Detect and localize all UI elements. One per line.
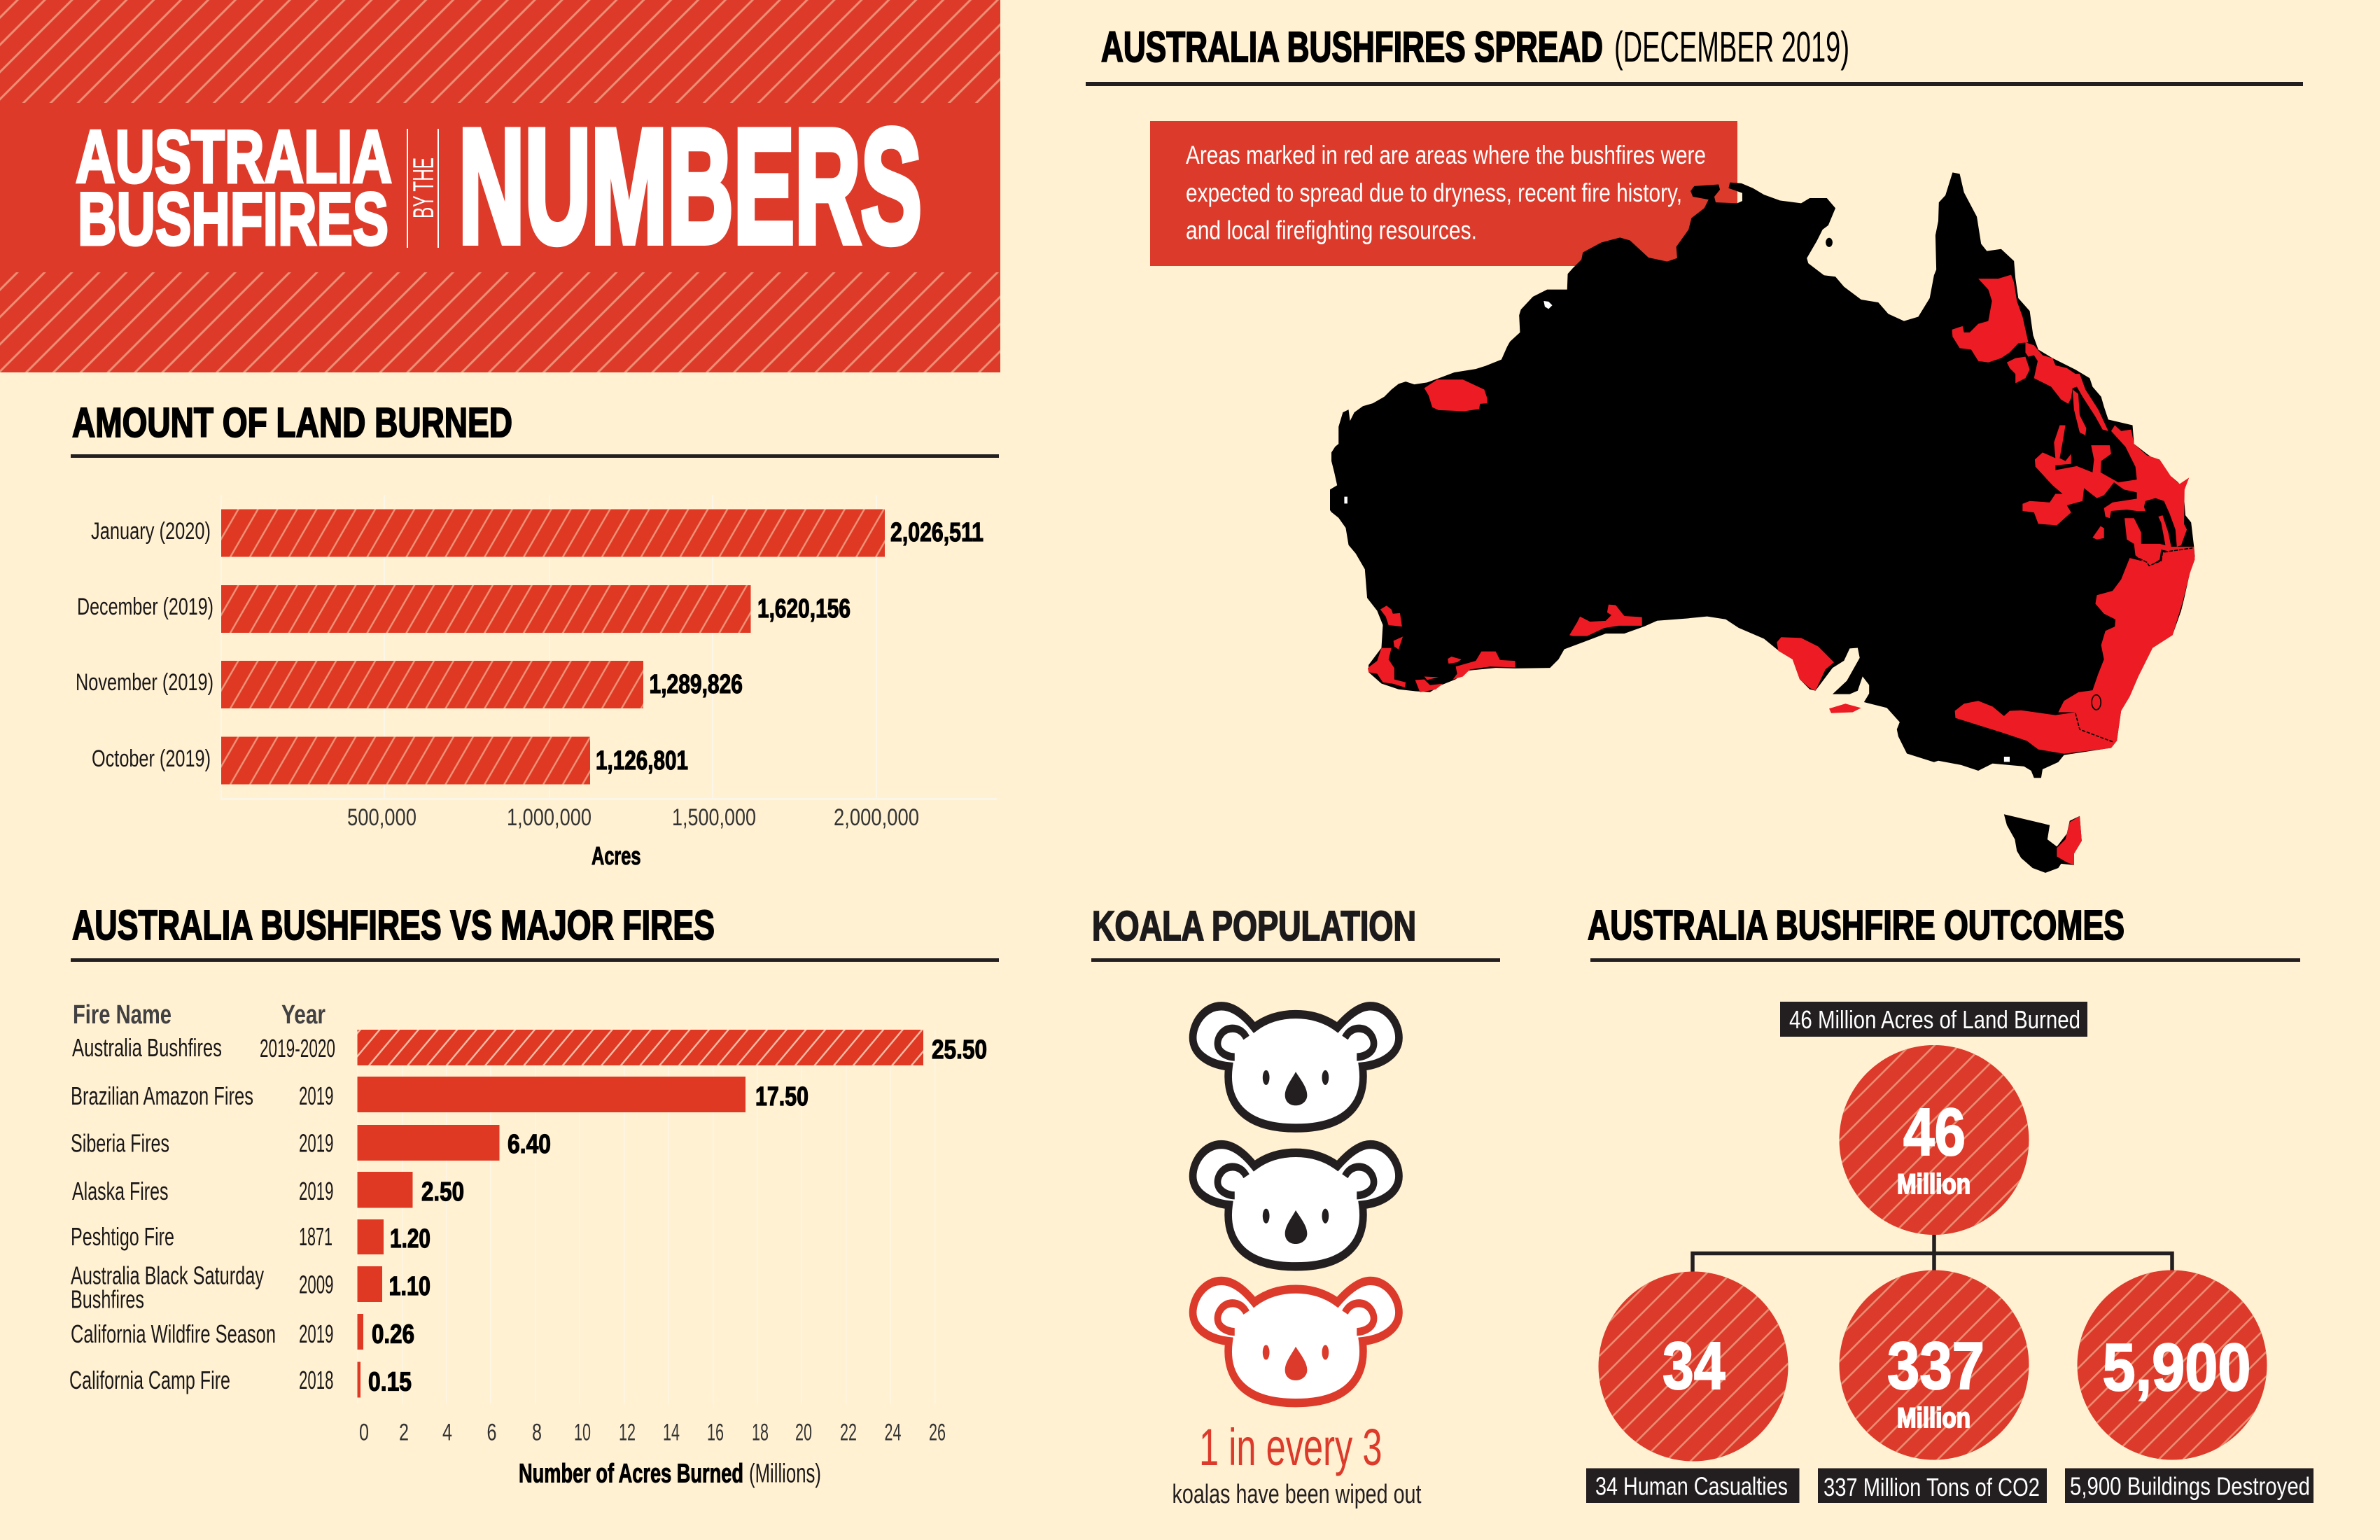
callout: map explanation [1150,121,1737,266]
x axis title: (Millions) [749,1459,821,1488]
fire area: west interior [1424,379,1487,412]
row: Australia Black Saturday Bushfires: 1.10 [389,1272,430,1301]
row: Australia Black Saturday Bushfires [71,1261,430,1313]
row: Peshtigo Fire: 1871 [299,1222,332,1251]
header banner [0,0,1000,372]
row: California Wildfire Season [71,1314,414,1350]
row: California Wildfire Season: California Wildfire Season [71,1320,276,1348]
row: Australia Black Saturday Bushfires: Bushfires [71,1285,144,1313]
koala icons [1193,1006,1399,1403]
bar: December 2019: 1,620,156 [757,594,850,624]
row: Brazilian Amazon Fires: 2019 [299,1082,333,1110]
bar: October 2019: 1,126,801 [596,746,688,776]
axis labels: acres: Acres [592,841,641,870]
title: Australia Bushfires: AUSTRALIA [76,115,392,199]
outcome: 34 human casualties: 34 [1662,1329,1725,1404]
outcome: 46 million acres: 46 Million Acres of Land Burned [1789,1005,2080,1034]
outcome: 337 million tons of CO2 [1818,1270,2047,1503]
row: Siberia Fires [71,1125,551,1161]
heading: bushfire outcomes: AUSTRALIA BUSHFIRE OUTCOMES [1588,902,2124,948]
outcome: 5,900 buildings destroyed: 5,900 Buildings Destroyed [2070,1471,2310,1501]
outcome: 5,900 buildings destroyed [2065,1270,2314,1503]
outcome: 34 human casualties [1586,1271,1799,1503]
axis labels: acres: 1,500,000 [672,804,756,831]
outcome: 34 human casualties: 34 Human Casualties [1595,1471,1788,1501]
bar: November 2019: November (2019) [76,669,214,696]
title: Numbers: NUMBERS [458,96,922,277]
x axis ticks: 18 [752,1420,769,1446]
row: Siberia Fires: Siberia Fires [71,1128,169,1158]
outcome: 337 million tons of CO2: 337 [1887,1329,1984,1404]
row: Alaska Fires [72,1172,464,1208]
row: California Camp Fire: California Camp Fire [69,1366,230,1394]
tasmania [2004,814,2082,873]
row: Australia Black Saturday Bushfires: 2009 [299,1270,333,1299]
row: Peshtigo Fire: 1.20 [390,1224,430,1254]
outcome: 46 million acres: 46 [1903,1095,1966,1170]
axis labels: acres: 2,000,000 [834,804,919,831]
mainland [1330,172,2195,778]
x axis ticks [359,1420,946,1446]
row: Brazilian Amazon Fires: Brazilian Amazon Fires [71,1082,253,1110]
x axis ticks: 0 [359,1420,369,1446]
fire areas: east coast [1952,274,2194,567]
row: Alaska Fires: 2.50 [421,1177,464,1207]
outcome: 5,900 buildings destroyed: 5,900 [2103,1330,2251,1405]
bar: October 2019: October (2019) [92,746,211,772]
x axis ticks: 6 [487,1420,497,1446]
outcome: 46 million acres: Million [1897,1169,1970,1200]
x axis ticks: 2 [399,1420,409,1446]
bar: December 2019 [77,585,850,633]
row: Peshtigo Fire [71,1219,430,1254]
row: California Camp Fire: 2018 [299,1366,333,1394]
row: California Camp Fire: 0.15 [368,1368,412,1397]
x axis ticks: 8 [532,1420,542,1446]
bar: December 2019: December (2019) [77,594,214,620]
row: Siberia Fires: 6.40 [507,1130,551,1159]
axis labels: acres: 1,000,000 [507,804,592,831]
outcome: 46 million acres [1780,1002,2087,1235]
bar chart: major fires comparison [69,1000,987,1488]
koala caption: koalas have been wiped out [1172,1480,1422,1509]
icon: koala 1 [1193,1006,1399,1128]
x axis ticks: 10 [574,1420,591,1446]
x axis title: Number of Acres Burned [519,1459,743,1488]
icon: koala 2 [1193,1144,1399,1266]
column headers [73,1000,326,1030]
bar: January 2020: 2,026,511 [890,518,983,547]
heading: bushfires vs major fires: AUSTRALIA BUSHFIRES VS MAJOR FIRES [72,902,715,948]
heading: bushfires spread: (DECEMBER 2019) [1614,23,1849,71]
row: Alaska Fires: Alaska Fires [72,1177,168,1205]
title: Australia Bushfires: BUSHFIRES [78,176,388,260]
row: Brazilian Amazon Fires: 17.50 [755,1082,808,1112]
bar: November 2019 [76,661,743,708]
x axis ticks: 16 [707,1420,724,1446]
bar: January 2020 [91,510,983,557]
connector lines [1693,1235,2172,1274]
heading: amount of land burned: AMOUNT OF LAND BURNED [72,400,512,446]
koala caption [1172,1418,1422,1509]
x axis ticks: 4 [442,1420,452,1446]
x axis ticks: 26 [929,1420,946,1446]
callout: map explanation: and local firefighting resources. [1186,216,1477,245]
column headers: Year [281,1000,326,1030]
icon: koala 3 (red) [1193,1281,1399,1403]
fire areas: south west [1368,605,1642,692]
row: Brazilian Amazon Fires [71,1077,808,1112]
bar: October 2019 [92,736,688,784]
map: Australia bushfire spread [1330,172,2195,873]
row: Australia Bushfires [72,1030,987,1065]
heading: bushfires spread: AUSTRALIA BUSHFIRES SPREAD [1101,23,1603,71]
bar: November 2019: 1,289,826 [650,670,743,699]
x axis ticks: 14 [663,1420,680,1446]
row: Peshtigo Fire: Peshtigo Fire [71,1222,174,1251]
axis labels: acres: 500,000 [347,804,416,831]
heading: koala population: KOALA POPULATION [1092,903,1416,949]
x axis ticks: 20 [795,1420,812,1446]
axis labels: acres [347,804,919,870]
outcome: 337 million tons of CO2: Million [1897,1403,1970,1434]
x axis ticks: 24 [885,1420,902,1446]
x axis ticks: 22 [840,1420,857,1446]
row: California Camp Fire [69,1362,412,1397]
title: by the: BY THE [407,158,440,218]
title: Australia Bushfires [76,115,392,260]
row: California Wildfire Season: 2019 [299,1320,333,1348]
callout: map explanation: Areas marked in red are areas where the bushfires were [1186,141,1706,169]
column headers: Fire Name [73,1000,172,1030]
callout: map explanation: expected to spread due to dryness, recent fire history, [1186,178,1682,207]
bar chart: land burned [76,495,997,870]
koala caption: 1 in every 3 [1199,1418,1382,1476]
row: Australia Bushfires: Australia Bushfires [72,1033,222,1062]
outcome: 337 million tons of CO2: 337 Million Tons of CO2 [1823,1473,2040,1502]
row: Australia Bushfires: 25.50 [932,1035,987,1065]
heading: bushfires spread [1086,23,2303,86]
x axis ticks: 12 [619,1420,636,1446]
fire areas: south east, south australia, tasmania [1777,547,2195,873]
row: California Wildfire Season: 0.26 [372,1320,414,1350]
row: Australia Black Saturday Bushfires: Australia Black Saturday [71,1261,264,1289]
row: Alaska Fires: 2019 [299,1177,333,1205]
heading: amount of land burned [71,400,999,458]
row: Australia Bushfires: 2019-2020 [260,1034,335,1063]
bar: January 2020: January (2020) [91,518,211,545]
row: Siberia Fires: 2019 [299,1128,333,1158]
